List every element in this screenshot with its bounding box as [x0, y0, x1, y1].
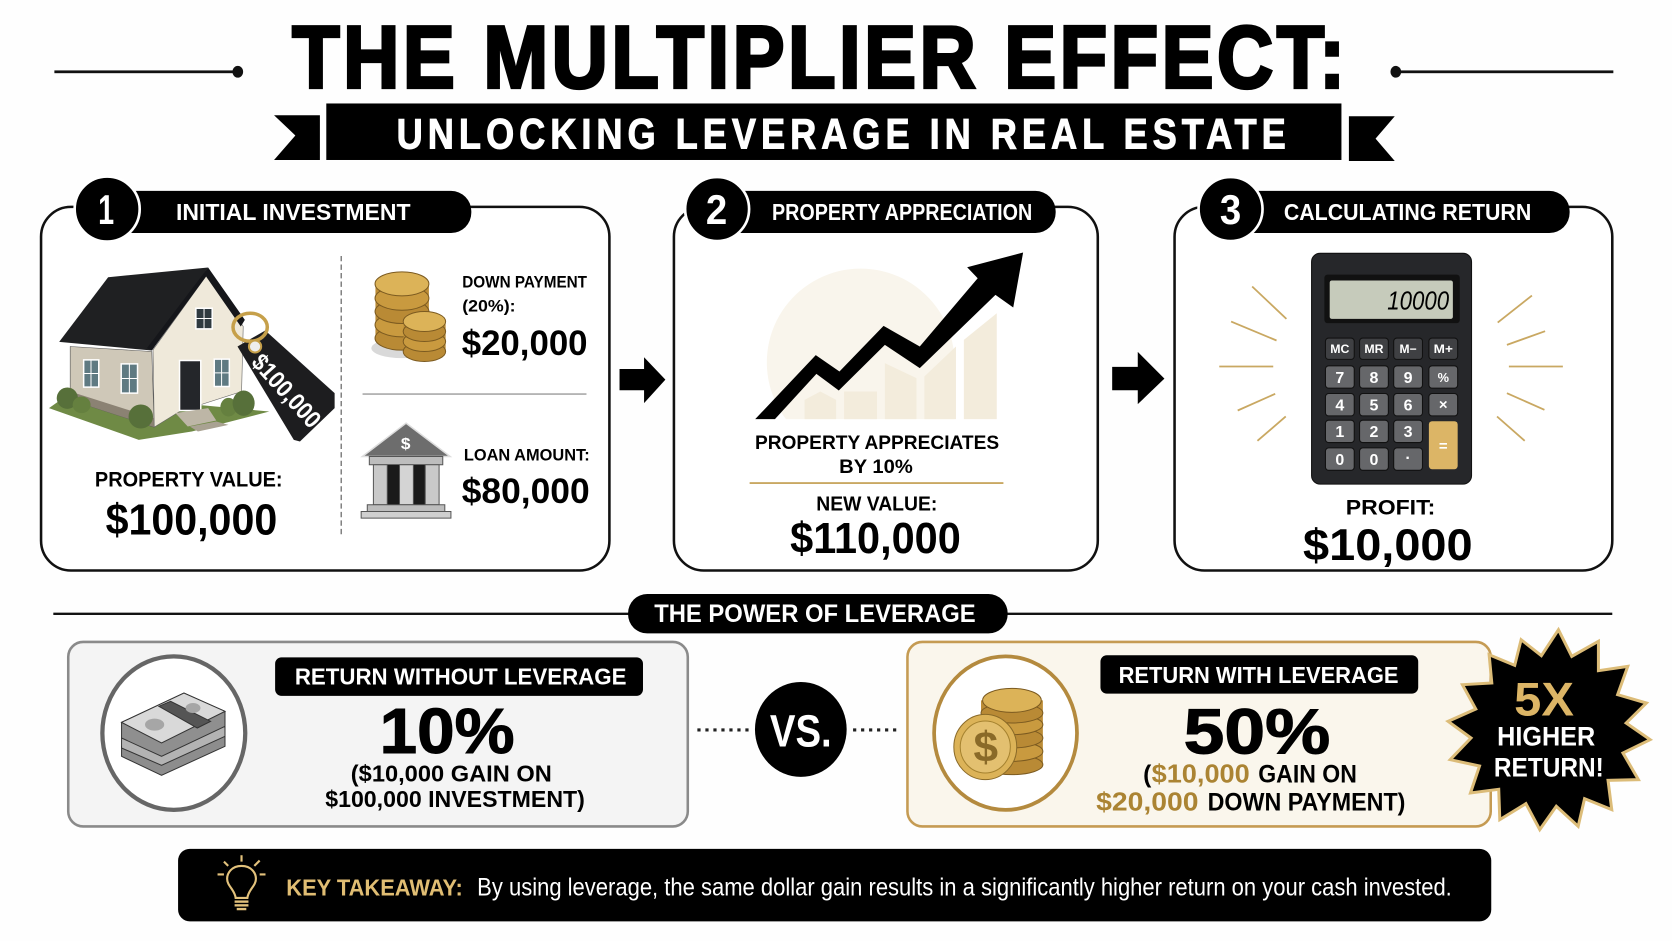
icon: calculator: 8 — [1370, 370, 1379, 387]
badge: 5x higher return: HIGHER — [1497, 721, 1595, 751]
icon: calculator: 0 — [1335, 452, 1344, 469]
note: $20,000 — [1096, 788, 1199, 816]
section heading: the power of leverage — [53, 594, 1612, 633]
vs connector — [697, 682, 901, 777]
down payment: DOWN PAYMENT — [462, 272, 587, 291]
value: 10%: 10% — [380, 695, 515, 767]
icon: gold coins — [934, 656, 1077, 810]
icon: house with price tag — [49, 268, 335, 441]
icon: bank — [361, 423, 451, 518]
icon: calculator: 5 — [1370, 398, 1379, 415]
icon: calculator: 3 — [1404, 424, 1413, 441]
label — [1100, 655, 1418, 694]
note — [1096, 760, 1405, 816]
icon: calculator: M+ — [1434, 343, 1453, 356]
label: RETURN WITH LEVERAGE — [1119, 662, 1398, 688]
appreciation text: PROPERTY APPRECIATES — [755, 432, 999, 454]
badge: 5x higher return — [1448, 630, 1650, 830]
value: 50%: 50% — [1184, 696, 1330, 768]
header: step 2: PROPERTY APPRECIATION — [772, 199, 1032, 225]
icon: calculator: × — [1439, 397, 1448, 414]
icon: gold coins: $ — [974, 723, 998, 771]
panel: property appreciation — [674, 177, 1098, 571]
down payment — [462, 272, 588, 363]
icon: calculator: 6 — [1404, 398, 1413, 415]
icon: calculator: MR — [1364, 343, 1384, 356]
badge: 5x higher return: 5X — [1514, 674, 1574, 726]
arrow: step 1 to 2 — [620, 357, 665, 403]
property value: PROPERTY VALUE: — [95, 468, 283, 491]
icon: rays — [1219, 287, 1563, 441]
icon: calculator: 4 — [1335, 398, 1344, 415]
icon: calculator: · — [1405, 450, 1411, 467]
icon: bank: $ — [401, 436, 411, 453]
icon: calculator: 7 — [1335, 370, 1344, 387]
property value — [95, 468, 283, 544]
icon: calculator: MC — [1330, 343, 1350, 356]
icon: house with price tag: $100,000 — [246, 349, 326, 434]
icon: calculator: 10000 — [1387, 287, 1450, 315]
icon: light bulb — [218, 855, 266, 909]
header: step 1: INITIAL INVESTMENT — [176, 199, 411, 225]
takeaway text: KEY TAKEAWAY: — [286, 875, 463, 901]
note: GAIN ON — [1258, 761, 1357, 788]
section heading: the power of leverage: THE POWER OF LEVERAGE — [654, 601, 976, 628]
appreciation text — [755, 432, 999, 478]
new value: NEW VALUE: — [816, 493, 937, 515]
header: step 3 — [1199, 177, 1570, 241]
new value: $110,000 — [790, 514, 961, 563]
panel: return without leverage — [68, 642, 688, 826]
icon: calculator: M− — [1400, 343, 1417, 356]
chart: rising arrow over bars — [755, 253, 1023, 419]
key takeaway bar — [178, 849, 1491, 921]
label: RETURN WITHOUT LEVERAGE — [295, 664, 626, 690]
title decoration: left line — [54, 66, 243, 78]
profit — [1303, 496, 1473, 570]
note: ($10,000 GAIN ON — [351, 760, 552, 786]
takeaway text: By using leverage, the same dollar gain results in a significantly higher return on your cash invested. — [477, 875, 1452, 902]
header: step 3: CALCULATING RETURN — [1284, 199, 1531, 225]
header: step 2: 2 — [706, 186, 727, 233]
down payment: $20,000 — [462, 324, 588, 363]
badge: 5x higher return: RETURN! — [1494, 752, 1604, 782]
subtitle ribbon: UNLOCKING LEVERAGE IN REAL ESTATE — [397, 111, 1286, 158]
icon: calculator: = — [1439, 438, 1448, 455]
panel: calculating return — [1175, 177, 1612, 571]
icon: calculator: 1 — [1335, 424, 1344, 441]
profit: PROFIT: — [1346, 496, 1435, 520]
header: step 3: 3 — [1220, 186, 1241, 233]
vs connector: VS. — [770, 704, 832, 756]
loan amount: LOAN AMOUNT: — [464, 446, 590, 465]
icon: calculator — [1312, 253, 1472, 484]
panel: initial investment — [41, 177, 609, 571]
note — [325, 760, 585, 812]
loan amount: $80,000 — [462, 472, 590, 511]
property value: $100,000 — [106, 495, 277, 544]
note: DOWN PAYMENT) — [1208, 789, 1405, 816]
icon: calculator: 9 — [1404, 370, 1413, 387]
icon: calculator: 0 — [1370, 452, 1379, 469]
icon: cash stack — [102, 656, 245, 810]
note: $10,000 — [1152, 760, 1250, 788]
label — [275, 657, 643, 696]
down payment: (20%): — [462, 296, 516, 315]
header: step 2 — [685, 177, 1056, 241]
subtitle ribbon — [274, 103, 1395, 161]
panel: return with leverage — [907, 642, 1491, 826]
title decoration: right line — [1390, 66, 1613, 78]
header: step 1 — [75, 177, 471, 242]
title: THE MULTIPLIER EFFECT: — [292, 8, 1345, 107]
appreciation text: BY 10% — [839, 456, 913, 478]
profit: $10,000 — [1303, 520, 1473, 570]
icon: calculator: % — [1438, 370, 1450, 385]
icon: calculator: 2 — [1370, 424, 1379, 441]
note: $100,000 INVESTMENT) — [325, 786, 585, 812]
new value — [790, 493, 961, 563]
loan amount — [462, 446, 590, 511]
note: ( — [1143, 761, 1152, 788]
icon: coin stack — [371, 272, 446, 362]
header: step 1: 1 — [98, 186, 114, 233]
arrow: step 2 to 3 — [1112, 352, 1164, 404]
